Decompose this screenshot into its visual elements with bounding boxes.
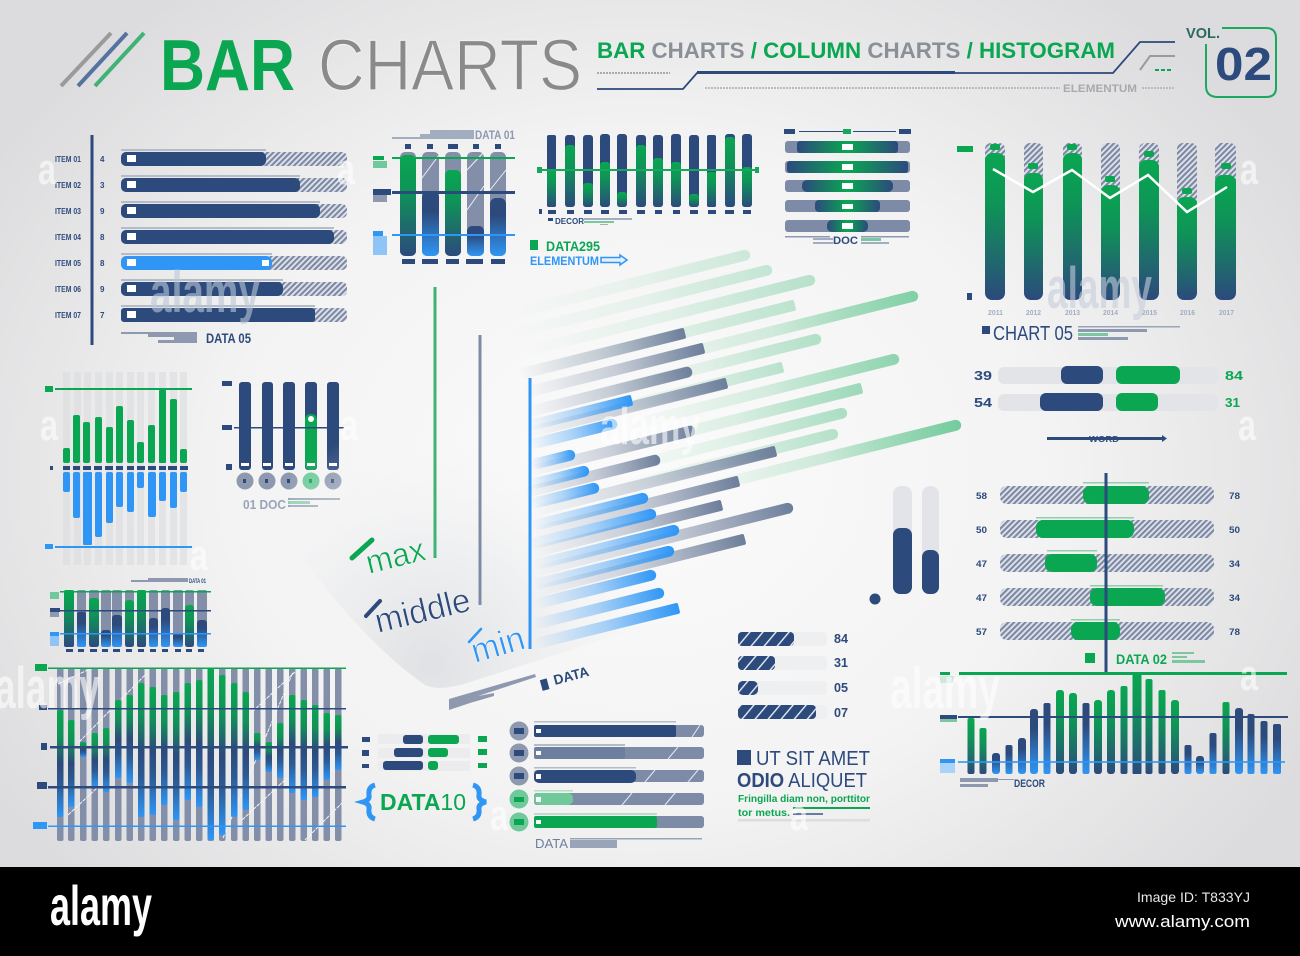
row labels: ITEM 03 bbox=[55, 207, 81, 216]
average line bbox=[537, 167, 759, 173]
tracks bbox=[998, 367, 1218, 411]
positive columns bbox=[63, 390, 187, 463]
panel: small column chart bbox=[50, 578, 211, 652]
axis bbox=[90, 135, 94, 345]
legend markers bbox=[373, 156, 391, 255]
label: elementum: ELEMENTUM bbox=[1063, 83, 1137, 95]
hatched tracks bbox=[121, 152, 347, 322]
caption: data 295 and elementum: ELEMENTUM bbox=[530, 254, 599, 268]
navy columns bbox=[239, 382, 339, 470]
watermarks: alamy bbox=[150, 260, 260, 325]
watermarks: a bbox=[40, 401, 58, 450]
caption: data 295 and elementum: DATA295 bbox=[546, 238, 600, 254]
caption rules bbox=[738, 807, 870, 822]
gradient values bbox=[787, 141, 908, 232]
tracks bbox=[738, 632, 827, 719]
hatched tops bbox=[985, 143, 1236, 213]
value labels: 84 bbox=[834, 631, 849, 646]
panel: horizontal bars bbox=[55, 135, 347, 346]
watermarks: a bbox=[1240, 651, 1258, 700]
footer bar bbox=[0, 867, 1300, 956]
row labels: 3 bbox=[100, 181, 105, 190]
panel: hatched mini bars bbox=[738, 631, 849, 720]
row labels: ITEM 04 bbox=[55, 233, 81, 242]
gauge tracks bbox=[893, 486, 939, 594]
arrow with word bbox=[1047, 435, 1167, 444]
navy values bbox=[1040, 366, 1103, 411]
volume badge bbox=[1186, 25, 1276, 97]
panel: column chart 05 bbox=[957, 143, 1236, 345]
column values bbox=[57, 668, 342, 840]
subtitle: BAR CHARTS / COLUMN CHARTS / HISTOGRAM bbox=[597, 38, 1115, 63]
caption: data bbox=[449, 663, 591, 710]
axis labels bbox=[222, 381, 232, 470]
label: min: min bbox=[467, 619, 529, 671]
watermarks: alamy bbox=[1047, 256, 1152, 321]
middle axis bbox=[478, 335, 482, 605]
panel: data 10 mini bars bbox=[362, 734, 487, 819]
icon: small square bbox=[737, 750, 751, 765]
header bbox=[61, 25, 1276, 106]
gauge marker bbox=[870, 594, 880, 604]
green paragraph: Fringilla diam non, porttitor bbox=[738, 793, 870, 805]
green paragraph: tor metus. bbox=[738, 807, 790, 819]
panel: large column chart bbox=[33, 664, 348, 841]
watermarks: a bbox=[790, 791, 808, 840]
watermarks: a bbox=[38, 145, 56, 194]
value labels: 31 bbox=[834, 655, 848, 670]
green bars bbox=[506, 249, 962, 497]
row labels: 4 bbox=[100, 155, 105, 164]
white tags bbox=[842, 144, 853, 229]
caption: decor bbox=[960, 778, 1045, 790]
icon: left brace bbox=[363, 785, 375, 819]
bar values bbox=[534, 725, 676, 828]
icon: right brace bbox=[473, 785, 486, 819]
watermarks: a bbox=[340, 401, 358, 450]
row labels: 58 bbox=[976, 491, 987, 501]
row labels: 47 bbox=[976, 559, 987, 569]
footer logo: alamy bbox=[50, 874, 152, 937]
volume badge: 02 bbox=[1215, 38, 1272, 90]
label: data 10: DATA10 bbox=[380, 789, 466, 815]
panel: two vertical gauges bbox=[870, 486, 939, 604]
caption: data 01 small bbox=[131, 578, 206, 585]
image id: Image ID: T833YJ bbox=[1137, 889, 1250, 905]
heading line 1: UT SIT AMET bbox=[756, 748, 870, 770]
value labels: 07 bbox=[834, 705, 848, 720]
tick labels bbox=[66, 649, 204, 652]
gray bars bbox=[519, 328, 794, 596]
watermarks: alamy bbox=[890, 656, 1000, 721]
watermarks: alamy bbox=[600, 398, 700, 456]
tick labels: 2017 bbox=[1219, 310, 1234, 317]
value labels bbox=[834, 631, 849, 720]
value labels: 84 bbox=[1225, 368, 1244, 383]
value labels: 39 bbox=[974, 368, 992, 383]
bar values bbox=[121, 152, 334, 322]
row labels: 78 bbox=[1229, 491, 1240, 501]
title: CHARTS bbox=[318, 26, 582, 106]
green values bbox=[547, 137, 752, 207]
tick labels: 2012 bbox=[1026, 310, 1041, 317]
row labels bbox=[976, 491, 1240, 637]
panel: centred pills bbox=[784, 129, 911, 247]
gray tracks bbox=[534, 725, 704, 828]
max axis bbox=[434, 287, 436, 558]
caption: data 05 bbox=[121, 330, 251, 346]
axis markers bbox=[33, 664, 47, 829]
label: middle: middle bbox=[371, 581, 474, 641]
blue bars bbox=[528, 395, 680, 650]
gray columns bbox=[57, 668, 342, 841]
row labels: 34 bbox=[1229, 559, 1240, 569]
text block: lorem caption bbox=[737, 748, 870, 822]
min axis bbox=[528, 378, 532, 649]
caption: data: DATA bbox=[535, 836, 568, 851]
row labels bbox=[55, 155, 105, 320]
watermarks: a bbox=[490, 791, 508, 840]
row labels: 8 bbox=[100, 233, 105, 242]
zero row bbox=[50, 466, 188, 470]
legend markers bbox=[50, 592, 60, 646]
value labels bbox=[974, 368, 1244, 410]
trend line bbox=[993, 169, 1227, 212]
tick labels bbox=[539, 209, 751, 214]
gray tracks bbox=[785, 141, 910, 232]
icon: arrow bbox=[601, 255, 627, 265]
arrow with word: WORD bbox=[1089, 435, 1119, 444]
caption: decor bbox=[548, 217, 632, 226]
row labels bbox=[362, 737, 370, 768]
top rules bbox=[534, 721, 676, 815]
panel: column chart data 01 bbox=[373, 128, 515, 264]
watermarks bbox=[0, 145, 1258, 840]
centre axis bbox=[1104, 473, 1108, 672]
caption: data 01 bbox=[392, 128, 515, 142]
white bar tags bbox=[536, 729, 541, 824]
gray columns bbox=[400, 152, 506, 256]
guide lines bbox=[940, 672, 1288, 763]
row labels: 47 bbox=[976, 593, 987, 603]
row labels: 78 bbox=[1229, 627, 1240, 637]
limit lines and markers bbox=[45, 386, 192, 549]
hatched tracks bbox=[1000, 486, 1214, 640]
panel: max middle min bars bbox=[290, 249, 962, 710]
panel: navy and green columns bbox=[537, 134, 759, 226]
row labels: ITEM 02 bbox=[55, 181, 81, 190]
header rules bbox=[597, 42, 1175, 89]
row labels: 50 bbox=[976, 525, 987, 535]
row labels: ITEM 05 bbox=[55, 259, 81, 268]
caption: data 01 small: DATA 01 bbox=[189, 579, 206, 585]
watermarks: a bbox=[1240, 145, 1258, 194]
tick labels: 2015 bbox=[1142, 310, 1157, 317]
guide lines bbox=[60, 591, 211, 634]
row labels: 8 bbox=[100, 259, 105, 268]
caption: chart 05: CHART 05 bbox=[993, 323, 1073, 345]
tracks bbox=[378, 734, 470, 771]
faint tracks bbox=[63, 372, 187, 565]
green values bbox=[1116, 366, 1180, 411]
panel: hatched range rows bbox=[976, 473, 1240, 672]
row labels: 7 bbox=[100, 311, 105, 320]
volume badge: VOL. bbox=[1186, 25, 1220, 42]
row labels: 50 bbox=[1229, 525, 1240, 535]
gradient columns bbox=[985, 153, 1236, 300]
guide lines bbox=[48, 668, 348, 827]
histogram columns bbox=[968, 673, 1281, 774]
row labels: ITEM 01 bbox=[55, 155, 81, 164]
highlighted value bbox=[305, 414, 317, 470]
watermarks: a bbox=[190, 531, 208, 580]
guide lines bbox=[392, 157, 515, 236]
title: BAR bbox=[160, 26, 295, 106]
caption: data 02 bbox=[1085, 651, 1205, 667]
tick labels bbox=[402, 144, 505, 264]
value labels: 05 bbox=[834, 680, 848, 695]
value caps bbox=[990, 144, 1231, 194]
green paragraph bbox=[738, 793, 870, 819]
caption: data 01: DATA 01 bbox=[475, 128, 515, 142]
row labels: ITEM 06 bbox=[55, 285, 81, 294]
label: max: max bbox=[362, 530, 429, 581]
gauge values bbox=[893, 528, 939, 594]
caption: data 295 and elementum bbox=[530, 238, 627, 268]
panel: doc columns bbox=[222, 381, 344, 512]
panel: progress list bbox=[510, 721, 704, 851]
caption: chart 05 bbox=[982, 323, 1180, 345]
watermarks: a bbox=[1238, 401, 1256, 450]
panel: mirrored column chart bbox=[45, 372, 192, 565]
navy tracks bbox=[547, 134, 752, 207]
caption: data bbox=[535, 836, 702, 851]
value labels: 31 bbox=[1225, 395, 1240, 410]
column values bbox=[400, 155, 506, 256]
caption: decor: DECOR bbox=[1014, 778, 1045, 790]
navy values bbox=[383, 735, 423, 770]
diagonal highlights bbox=[622, 725, 700, 805]
column values bbox=[64, 590, 207, 647]
tick labels: 2014 bbox=[1103, 310, 1118, 317]
row labels: ITEM 07 bbox=[55, 311, 81, 320]
round value badges bbox=[236, 472, 342, 490]
heading line 2: ODIO ALIQUET bbox=[737, 770, 867, 792]
green ranges bbox=[1036, 486, 1165, 640]
caption: doc: DOC bbox=[833, 235, 858, 247]
tick labels: 2016 bbox=[1180, 310, 1195, 317]
striped values bbox=[738, 632, 816, 719]
white bar tags bbox=[127, 155, 269, 318]
caption: data 02: DATA 02 bbox=[1116, 651, 1167, 667]
row labels: 57 bbox=[976, 627, 987, 637]
caption: decor: DECOR bbox=[555, 217, 584, 226]
panel: diverging pills bbox=[974, 366, 1244, 444]
round icons bbox=[510, 722, 528, 832]
row labels: 9 bbox=[100, 285, 105, 294]
row labels: 9 bbox=[100, 207, 105, 216]
axis markers bbox=[957, 146, 973, 300]
tick labels bbox=[988, 310, 1234, 317]
green values bbox=[428, 735, 487, 770]
white marks bbox=[241, 416, 337, 466]
caption: data 05: DATA 05 bbox=[206, 330, 251, 346]
diagonal highlights bbox=[422, 152, 506, 210]
value labels: 54 bbox=[974, 395, 993, 410]
tick labels: 2013 bbox=[1065, 310, 1080, 317]
white dashed diagonals bbox=[58, 668, 342, 840]
icon: label ticks bbox=[352, 540, 481, 642]
legend markers bbox=[940, 676, 957, 773]
tick labels: 2011 bbox=[988, 310, 1003, 317]
negative columns bbox=[63, 472, 187, 545]
website: www.alamy.com bbox=[1114, 912, 1250, 931]
gray columns bbox=[64, 590, 207, 647]
top scale bbox=[784, 129, 911, 134]
row labels: 34 bbox=[1229, 593, 1240, 603]
soft backdrop bbox=[290, 300, 760, 688]
panel: lower right histogram bbox=[940, 672, 1288, 790]
reference line bbox=[234, 427, 344, 428]
thin top rules bbox=[121, 149, 334, 307]
caption: data: DATA bbox=[552, 663, 591, 688]
caption: 01 doc: 01 DOC bbox=[243, 497, 287, 512]
range top rules bbox=[1036, 482, 1163, 620]
watermarks: a bbox=[337, 145, 355, 194]
icon: diagonal stripes bbox=[61, 33, 144, 86]
